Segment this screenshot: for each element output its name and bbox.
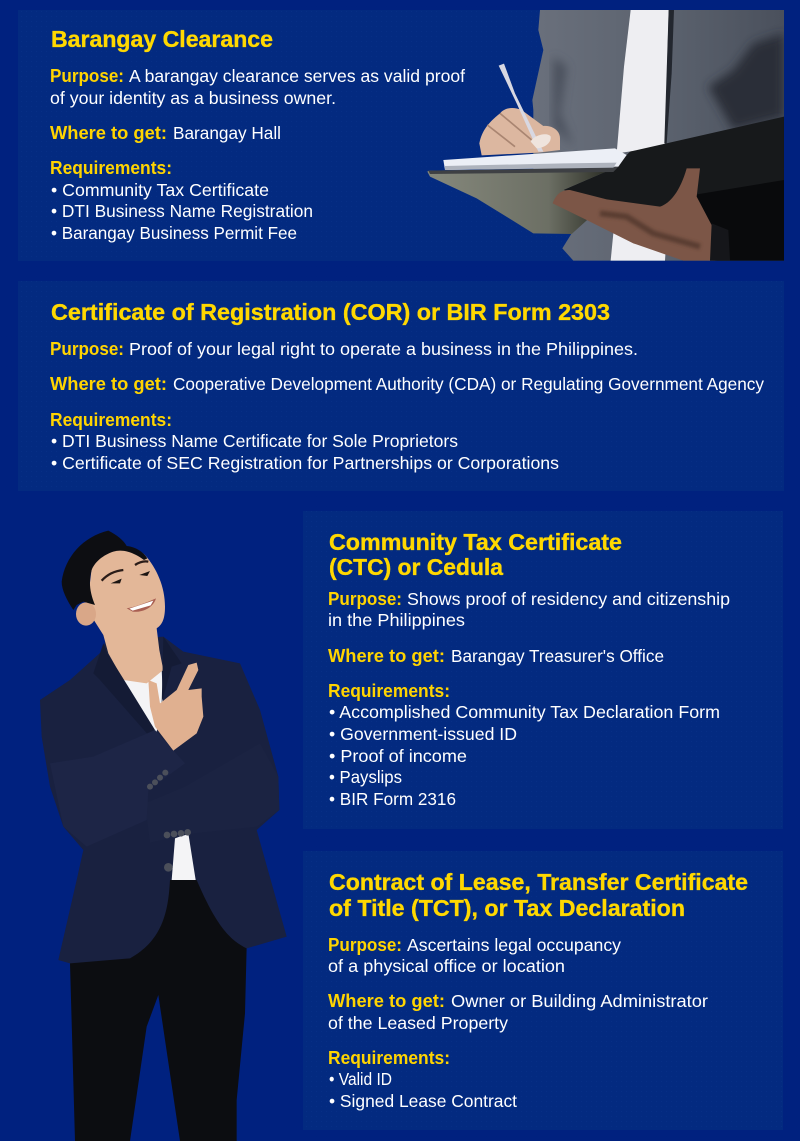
purpose text: Ascertains legal occupancy	[407, 935, 621, 955]
purpose text: Proof of your legal right to operate a business in the Philippines.	[129, 339, 638, 359]
heading: Community Tax Certificate: (CTC) or Cedula	[329, 554, 503, 580]
photo: smiling man in a dark suit pointing up	[40, 531, 287, 1141]
purpose text: Purpose:	[328, 935, 402, 955]
requirements list	[50, 410, 559, 473]
requirements list	[328, 1048, 517, 1111]
heading: Contract of Lease: of Title (TCT), or Tax Declaration	[329, 895, 685, 921]
purpose text: A barangay clearance serves as valid proof	[129, 66, 465, 86]
heading: Barangay Clearance: Barangay Clearance	[51, 26, 273, 52]
where to get text: of the Leased Property	[328, 1013, 508, 1033]
where to get text: Where to get:	[50, 123, 167, 143]
requirements list: • Barangay Business Permit Fee	[51, 223, 297, 243]
ear	[76, 602, 96, 626]
where to get text: Where to get:	[328, 991, 445, 1011]
eyes, brows and smile	[102, 561, 156, 612]
jacket	[40, 637, 287, 963]
requirements list: • Valid ID	[329, 1069, 392, 1089]
lapels	[93, 637, 182, 735]
requirements list: Requirements:	[50, 410, 172, 430]
where to get text: Barangay Hall	[173, 123, 281, 143]
purpose text	[50, 66, 465, 108]
requirements list	[328, 681, 720, 809]
purpose text: Purpose:	[50, 66, 124, 86]
purpose text: of a physical office or location	[328, 956, 565, 976]
purpose text: Shows proof of residency and citizenship	[407, 589, 730, 609]
purpose text	[328, 589, 730, 630]
requirements list: • Certificate of SEC Registration for Partnerships or Corporations	[51, 453, 559, 473]
purpose text: Purpose:	[328, 589, 402, 609]
where to get text: Cooperative Development Authority (CDA) or Regulating Government Agency	[173, 374, 764, 394]
panel: Contract of Lease	[303, 851, 783, 1130]
requirements list: • Proof of income	[329, 746, 467, 766]
lower arm	[145, 743, 279, 843]
requirements list: • DTI Business Name Registration	[51, 201, 313, 221]
purpose text: Purpose:	[50, 339, 124, 359]
panel: Barangay Clearance	[18, 10, 784, 261]
neck and face	[88, 547, 165, 683]
where to get text	[50, 123, 281, 143]
hair	[62, 531, 147, 610]
requirements list: • Payslips	[329, 767, 402, 787]
requirements list: • DTI Business Name Certificate for Sole Proprietors	[51, 431, 458, 451]
pointing hand	[148, 663, 203, 751]
where to get text: Where to get:	[50, 374, 167, 394]
requirements list: • Accomplished Community Tax Declaration Form	[329, 702, 720, 722]
heading: Contract of Lease: Contract of Lease, Transfer Certificate	[329, 869, 748, 895]
upper sleeve	[50, 730, 185, 847]
trousers	[70, 880, 247, 1141]
where to get text	[328, 646, 664, 666]
photo: hands writing on a clipboard	[427, 10, 784, 261]
purpose text: of your identity as a business owner.	[50, 88, 336, 108]
heading: Community Tax Certificate: Community Tax Certificate	[329, 529, 622, 555]
requirements list: • Community Tax Certificate	[51, 180, 269, 200]
heading: Contract of Lease	[329, 869, 748, 921]
panel: Certificate of Registration	[18, 281, 784, 491]
requirements list	[50, 158, 313, 243]
where to get text: Owner or Building Administrator	[451, 991, 708, 1011]
requirements list: • Signed Lease Contract	[329, 1091, 517, 1111]
requirements list: • Government-issued ID	[329, 724, 517, 744]
heading: Community Tax Certificate	[329, 529, 622, 580]
requirements list: Requirements:	[50, 158, 172, 178]
where to get text: Barangay Treasurer's Office	[451, 646, 664, 666]
where to get text	[328, 991, 708, 1033]
requirements list: Requirements:	[328, 1048, 450, 1068]
requirements list: Requirements:	[328, 681, 450, 701]
heading: Certificate of Registration: Certificate of Registration (COR) or BIR Form 2303	[51, 299, 610, 325]
purpose text: in the Philippines	[328, 610, 465, 630]
requirements list: • BIR Form 2316	[329, 789, 456, 809]
jacket buttons	[147, 770, 191, 872]
panel: Community Tax Certificate	[303, 511, 783, 829]
purpose text	[328, 935, 621, 976]
where to get text: Where to get:	[328, 646, 445, 666]
white shirt	[122, 668, 196, 880]
